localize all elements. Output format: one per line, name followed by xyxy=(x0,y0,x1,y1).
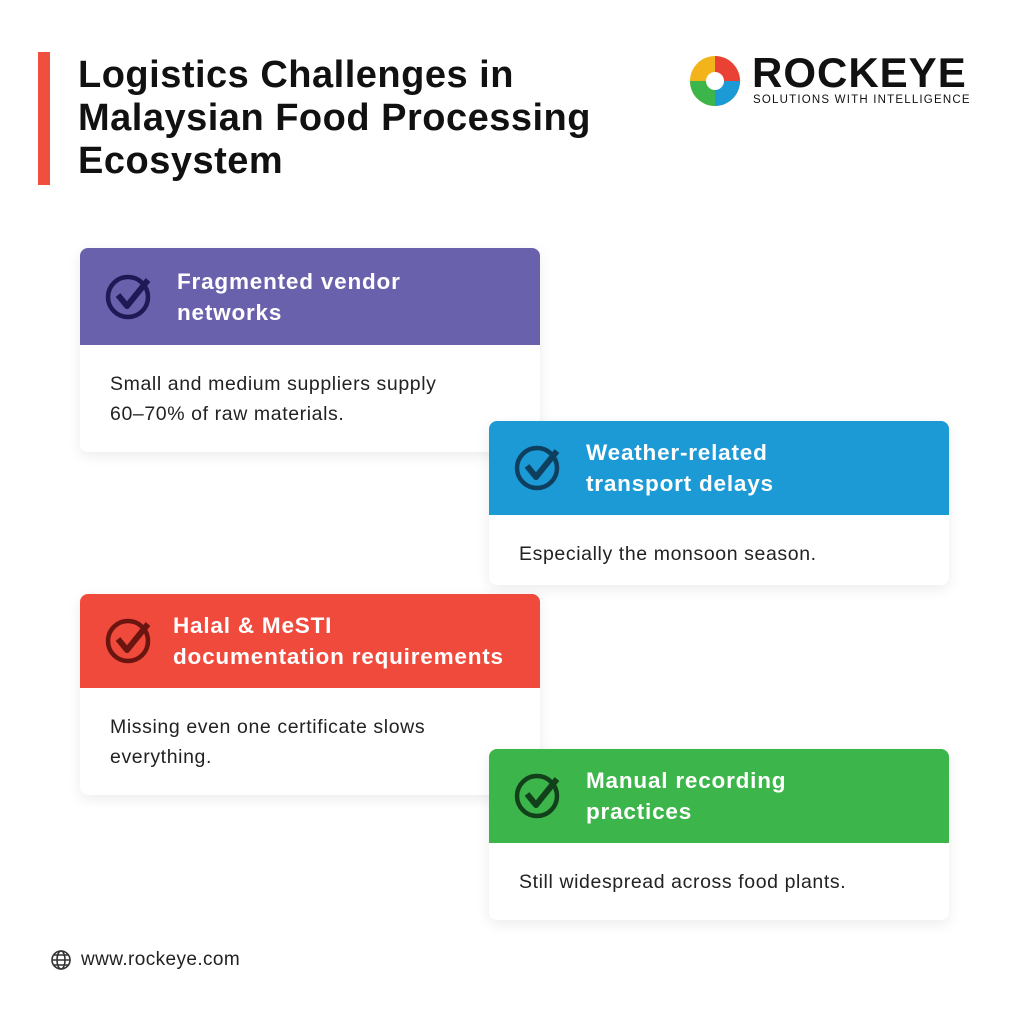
header: weather xyxy=(489,421,949,515)
accent bar xyxy=(38,52,50,185)
header: halal: documentation requirements xyxy=(173,644,504,669)
header: manual: practices xyxy=(586,799,692,824)
body text: Missing even one certificate slows xyxy=(110,716,425,738)
card 4 xyxy=(489,749,949,920)
body text: Small and medium suppliers supply xyxy=(110,373,437,395)
body text: 60–70% of raw materials. xyxy=(110,403,344,425)
title: Ecosystem xyxy=(78,140,283,182)
header: weather: Weather-related xyxy=(586,440,768,465)
card 2 xyxy=(489,421,949,585)
body text xyxy=(110,373,437,425)
header: fragmented xyxy=(80,248,540,345)
body text xyxy=(110,716,425,768)
icon: logo swirl xyxy=(690,56,740,106)
body text: Especially the monsoon season. xyxy=(519,543,817,565)
logo xyxy=(690,49,971,106)
title xyxy=(78,54,591,182)
header: manual xyxy=(489,749,949,843)
logo text: ROCKEYE xyxy=(752,49,967,96)
card 1 xyxy=(80,248,540,452)
icon: globe xyxy=(51,950,71,970)
title: Logistics Challenges in xyxy=(78,54,514,96)
header: weather: transport delays xyxy=(586,471,774,496)
body text: everything. xyxy=(110,746,212,768)
header: manual: Manual recording xyxy=(586,768,786,793)
footer website: www.rockeye.com xyxy=(81,949,240,970)
card 3 xyxy=(80,594,540,795)
header: halal: Halal & MeSTI xyxy=(173,613,332,638)
header: halal xyxy=(80,594,540,688)
header: fragmented: networks xyxy=(177,300,282,324)
header: fragmented: Fragmented vendor xyxy=(177,268,401,294)
title: Malaysian Food Processing xyxy=(78,97,591,139)
body text: Still widespread across food plants. xyxy=(519,871,846,893)
logo: SOLUTIONS WITH INTELLIGENCE xyxy=(753,94,971,106)
